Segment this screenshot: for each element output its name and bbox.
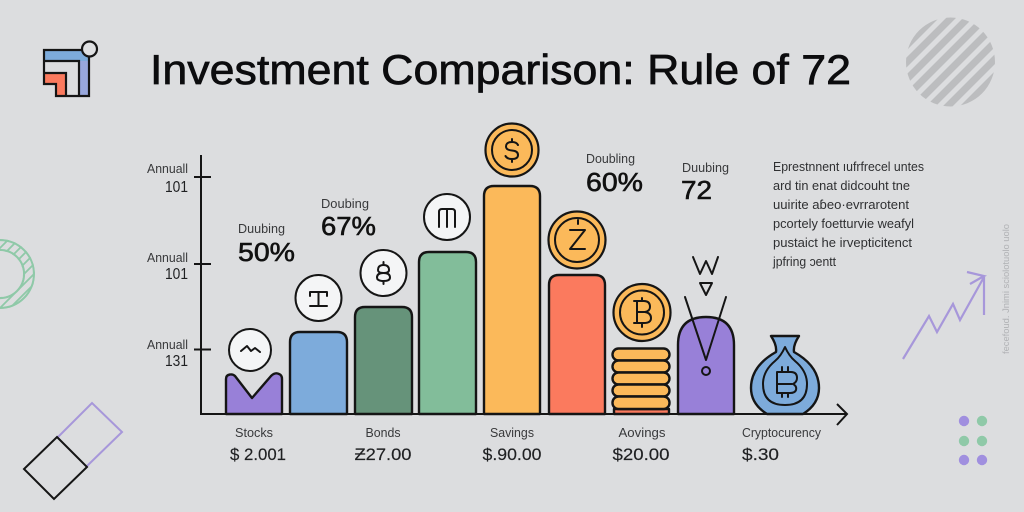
description text: pustaict he irvepticitenct bbox=[773, 236, 913, 250]
description text: ard tin enat didcouht tne bbox=[773, 179, 910, 193]
y axis labels: 101 bbox=[165, 266, 188, 283]
bar: purple arch bbox=[678, 317, 734, 414]
logo icon bbox=[44, 42, 97, 96]
callout: 67% bbox=[321, 196, 376, 241]
icon: T coin bbox=[296, 275, 342, 321]
callout: 72: Duubing bbox=[682, 160, 729, 175]
category label: aovings bbox=[612, 425, 670, 464]
y axis labels: Annuall bbox=[147, 337, 188, 352]
category label: cryptocurrency: Cryptocurency bbox=[742, 425, 821, 440]
icon: m coin bbox=[424, 194, 470, 240]
category label: stocks: Stocks bbox=[235, 425, 273, 440]
money bag: cryptocurrency bbox=[751, 336, 819, 414]
icon: bitcoin coin bbox=[614, 284, 670, 341]
category label: aovings: Aovings bbox=[618, 425, 666, 440]
callout: 50%: 50% bbox=[238, 237, 295, 267]
callout: 72: 72 bbox=[681, 175, 712, 205]
growth arrow bbox=[903, 272, 984, 359]
callout: 72 bbox=[681, 160, 729, 205]
icon: 8 coin bbox=[360, 250, 406, 296]
category label: savings: Savings bbox=[490, 425, 534, 440]
category label: stocks bbox=[230, 425, 286, 464]
bar: coral bbox=[549, 275, 605, 414]
decorative striped circle bbox=[906, 18, 995, 106]
decorative dots bbox=[959, 416, 987, 465]
callout: 67%: Doubing bbox=[321, 196, 369, 211]
icon: dollar coin bbox=[486, 124, 538, 176]
decorative diamonds bbox=[24, 403, 122, 499]
y axis labels: 101 bbox=[165, 179, 188, 196]
description text: Eprestnnent ıufrfrecel untes bbox=[773, 160, 924, 174]
bar: savings bbox=[484, 186, 540, 414]
description text: pcortely foetturvie weafyl bbox=[773, 217, 914, 231]
axes bbox=[194, 155, 847, 425]
callout: 67%: 67% bbox=[321, 211, 376, 241]
category label: savings bbox=[482, 425, 542, 464]
category label: bonds bbox=[354, 425, 412, 464]
bar chart bbox=[226, 186, 819, 414]
category label: savings: $.90.00 bbox=[482, 446, 542, 464]
bar: bonds green bbox=[355, 307, 412, 414]
y axis labels: 131 bbox=[165, 353, 188, 370]
decorative hatched ring bbox=[0, 239, 35, 309]
bar: light green bbox=[419, 252, 476, 414]
icon: Z coin bbox=[548, 212, 606, 268]
bar: stocks bbox=[226, 373, 282, 414]
callout: 60%: 60% bbox=[586, 167, 643, 197]
vertical side note: fecefoud. Jnimi sciolotuolo uolo bbox=[1001, 224, 1011, 354]
coin stack bbox=[612, 348, 670, 414]
category label: bonds: Ƶ27.00 bbox=[354, 446, 412, 464]
callout: 50% bbox=[238, 221, 295, 267]
y axis labels: Annuall bbox=[147, 250, 188, 265]
description text bbox=[772, 160, 924, 269]
bar: bonds blue bbox=[290, 332, 347, 414]
title: Investment Comparison: Rule of 72 bbox=[150, 46, 851, 93]
description text: jpfring ɔentt bbox=[772, 255, 837, 269]
category label: aovings: $20.00 bbox=[612, 446, 670, 464]
callout: 50%: Duubing bbox=[238, 221, 285, 236]
callout: 60%: Doubling bbox=[586, 151, 635, 166]
icon: W and triangle marker bbox=[685, 257, 726, 375]
description text: uuirite aɓeo·evrrarotent bbox=[773, 198, 910, 212]
icon: stocks coin bbox=[229, 329, 271, 371]
y axis labels: Annuall bbox=[147, 161, 188, 176]
y axis labels bbox=[147, 161, 188, 370]
category label: stocks: $ 2.001 bbox=[230, 446, 286, 464]
callout: 60% bbox=[586, 151, 643, 197]
category label: cryptocurrency bbox=[742, 425, 821, 464]
category label: cryptocurrency: $.30 bbox=[742, 446, 779, 464]
category label: bonds: Bonds bbox=[366, 425, 401, 440]
